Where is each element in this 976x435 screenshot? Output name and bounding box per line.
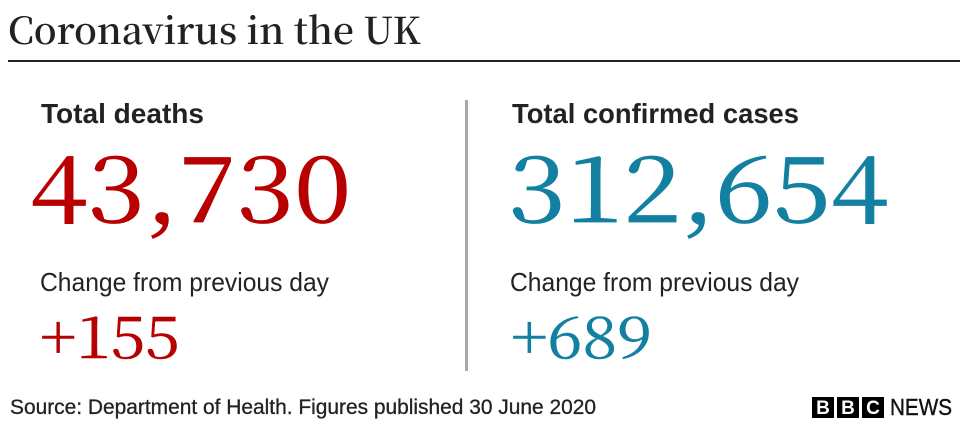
panel: total confirmed cases xyxy=(508,98,888,375)
logo: BBC News: C xyxy=(866,398,880,419)
deaths change label: Change from previous day xyxy=(40,267,329,297)
heading: total confirmed cases: Total confirmed cases xyxy=(512,98,799,129)
title: Coronavirus in the UK xyxy=(8,1,421,55)
deaths figure: 43,730 xyxy=(30,117,351,249)
cases change figure: +689 xyxy=(511,292,652,375)
logo: BBC News xyxy=(812,394,952,420)
panel: total deaths xyxy=(30,98,351,375)
logo: BBC News: NEWS xyxy=(890,394,952,420)
heading: total deaths: Total deaths xyxy=(41,98,204,129)
logo: BBC News: B xyxy=(816,398,830,419)
deaths change figure: +155 xyxy=(40,293,180,375)
panel divider xyxy=(465,100,468,371)
cases change label: Change from previous day xyxy=(510,267,799,297)
cases figure: 312,654 xyxy=(508,117,888,249)
source note: Source: Department of Health. Figures published 30 June 2020 xyxy=(10,396,596,419)
logo: BBC News: B xyxy=(841,398,855,419)
